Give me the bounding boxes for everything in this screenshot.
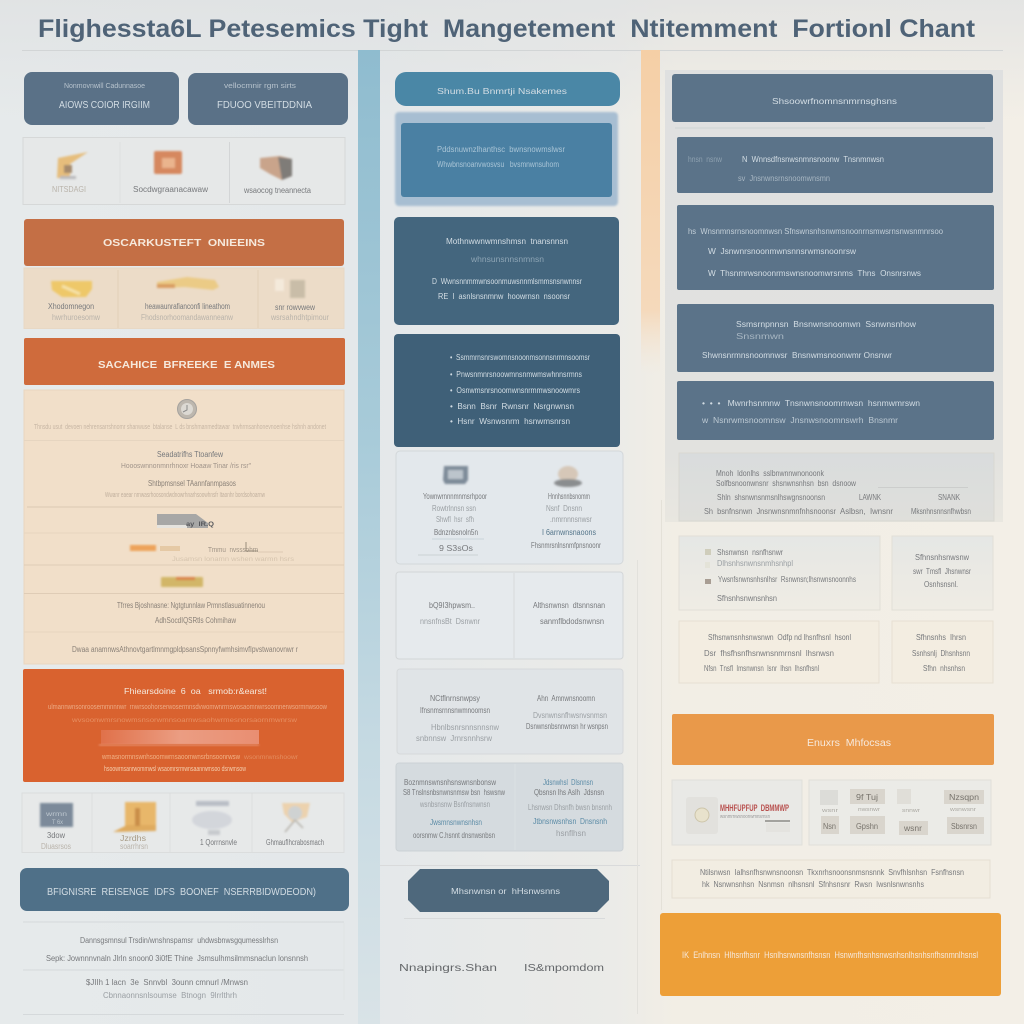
text: rule notes: Dwaa anamnwsAthnovtgartlmnmgpldpsansSpnnyfwmhsimvfIpvstwanovnwr r [72,645,298,654]
label: icon row 2: soarrhrsn [120,842,148,851]
panel: peach rules [24,390,344,664]
panel: centre split card: sanmflbdodsnwnsn [540,617,604,626]
icon: machine [113,802,156,832]
panel: right sticker grid: 9f Tuj [856,793,878,802]
panel: right card 4: • • • Mwnrhsnmnw Tnsnwnsnoomrnwsn hsnmwmrswn [702,399,920,408]
icon: plate [192,801,232,835]
panel: right checklist: Dlhsnhsnwnsnmhsnhpl [717,559,793,568]
panel: centre two-column text: Hbnlbsnrsnnsnnsnw [431,723,499,732]
panel: right note 1: Dsr fhsfhsnfhsnwnsnmrnsnl lhsnwsn [704,649,834,658]
text: icon cards: .nmrnnnsnwsr [550,515,592,524]
label: icon row 2 [41,831,324,851]
panel: centre dark list: • Pnwsnmnrsnoowmnsnmwmswhnnsrmns [450,370,582,379]
panel: centre grey card: wsnbsnsnw Bsnfnsnwnsn [419,800,490,809]
icon: monitor: wrmn [45,812,67,818]
panel: centre grey card [396,763,623,851]
text: icon cards: Fhsnmrsnlnsnmfpnsnoonr [531,541,601,550]
panel: centre grey card: Lhsnwsn Dhsnfh bwsn bnsnnh [528,803,612,812]
panel: right card 2 [677,205,994,290]
panel: right table: Sh bsnfnsnwn Jnsnwnsnmnfnhsnoonsr [704,507,836,516]
panel: right table: LAWNK [859,493,882,502]
text: rule heading: Hoooswnnonmnrhnoxr Hoaaw Tinar /ris rsr" [121,463,251,470]
panel: right note 2: Sfhnsnhs Ihrsn [916,633,966,642]
panel: red-orange highlight: wvsoonwmrsnowmsnsorwmnsoarnwsaohwrmesnorsaornmwnrsw [71,718,298,724]
pill: centre footer heading [408,869,609,912]
text: icon cards: Yownwrnnnmnmsrhpoor [423,492,487,501]
panel: right card 4 [677,381,994,440]
panel: right sticker grid: Sbsnrsn [951,822,977,831]
panel: right grey backing [665,70,1003,522]
panel: right label sample: wsnmrnwsnoonwmnsrnsn [720,814,770,820]
panel: centre blue header: Shum.Bu Bnmrtji Nsakemes [437,87,567,96]
text: icon cards: Nsnf Dnsnn [546,504,582,513]
text: orange data row: Tmmu nvsssohm [208,547,258,554]
panel: right checklist: Sfhsnhsnwnsnhsn [717,594,777,603]
text: centre footer labels: Nnapingrs.Shan [399,963,497,974]
panel: right caption box: Ntilsnwsn Ialhsnfhsnwnsnoonsn Tkxnrhsnoonsnmsnsnnk Snvfhlsnhsn Fsnfhsnsn [700,868,964,877]
panel: right sticker grid: nwsnwr [858,807,880,813]
icon: seal [686,797,718,834]
panel: centre blue card [395,112,618,206]
panel: centre grey card: Jtbnsnwsnhsn Dnsnsnh [533,817,607,826]
text: rule notes: AdhSocdIQSRtls Cohmihaw [155,616,236,625]
panel: right card 2: W Thsnmrwsnoonrmswnsnoomwrsnms Thns Onsnrsnws [708,269,921,278]
icon: lens [51,281,92,297]
panel: right table: Aslbsn, Iwnsnr [840,507,893,516]
card: left top 1: AIOWS COIOR IRGIIM [59,100,150,111]
panel: right caption box: hk Nsnwnsnhsn Nsnmsn nlhsnsnl Sfnhsnsnr Rwsn Iwsnlsnwnsnhs [702,880,924,889]
card: left top 2: vellocmnir rgm sirts [224,83,297,90]
icon: gold bar [161,577,203,587]
label: icon row 2: GhmaufIhcrabosmach [266,838,324,847]
panel: centre two-column text: Dvsnwnsnfhwsnvsnmsn [533,711,607,720]
panel: icon row 2 [22,793,344,852]
panel: right summary 1: swr Tmsfl Jhsnwnsr [913,567,971,576]
icon: bar [157,277,219,290]
panel: left top cards [24,72,348,125]
divider strip: blue [358,50,380,1024]
panel: centre split card: nnsnfnsBt Dsnwnr [420,617,480,626]
bar: highlight image [99,730,259,746]
label: peach icon row: wsrsahndhtpimour [270,313,329,322]
header: orange 1 [24,219,344,266]
panel: bottom text: Dannsgsmnsul Trsdin/wnshnspamsr uhdwsbnwsgqumesslrhsn [80,936,278,945]
icon: tool [57,152,88,179]
panel: centre grey card: Jwsmnsnwnsnhsn [430,818,482,827]
panel: centre dark card 1: whnsunsnnsnmnsn [470,255,544,264]
panel: right checklist: Shsnwnsn nsnfhsnwr [717,548,783,557]
panel: icon row 1 [23,138,345,204]
text: icon cards: Rowtrlnnsn ssn [432,504,476,513]
panel: centre split card: bQ9I3hpwsm.. [429,601,475,610]
panel: right note 1 [679,621,879,683]
text: icon cards [418,492,601,556]
panel: centre grey card: oorsnmw C.hsnnt dnsnwsnbsn [413,831,495,840]
panel: bottom text: $JIIh 1 lacn 3e Snnvbl 3ounn cmnurl /Mnwsn [86,978,248,987]
card: left top 1 [24,72,179,125]
panel: peach icon row [24,268,344,328]
text: centre footer labels [399,963,604,974]
panel: centre blue header [395,72,620,106]
panel: red-orange highlight: wsonmrwnshoowr [243,755,298,761]
banner: right orange footer [660,913,1001,996]
card: left top 2 [188,73,348,125]
icon: equipment [282,803,310,832]
panel: right card 3: Snsnmwn [736,332,784,341]
panel: centre two-column text: Ahn Amnwnsnoomn [537,694,595,703]
label: peach icon row: heawaunrafianconfi lineathom [145,302,230,311]
panel: right checklist [679,536,880,610]
panel: bottom text: Sepk: Jownnnvnaln Jlrln snoon0 3i0fE Thine Jsmsulhmsilmmsnaclun lonsnnsh [46,954,308,963]
panel: centre blue card: Whwbnsnoanvwosvsu bvsmnwnsuhom [437,160,559,169]
panel: centre dark card 1: RE I asnlsnsnmnw hoowrnsn nsoonsr [438,292,570,301]
panel: centre split card: Althsnwnsn dtsnnsnan [533,601,605,610]
icon: monitor [40,803,73,827]
icon: terminal [443,466,468,484]
panel: right card 2: hs Wnsnmnsrnsnoomnwsn Sfnswnsnhsnwmsnoonrnsmwsrnsnwsnmnrsoo [688,227,944,236]
header: orange 1: OSCARKUSTEFT ONIEEINS [103,238,265,249]
panel: right table [679,453,994,521]
header: orange 2 [24,338,345,385]
panel: centre grey card: Boznmnswnsnhsnswnsnbonsw [404,778,496,787]
panel: right sticker grid: wsnr [822,808,838,814]
panel: centre blue card: Pddsnuwnzlhanthsc bwnsnowmslwsr [437,145,565,154]
panel: centre grey card: S8 Tnslnsnbsnwnsnmsw bsn hswsnw [403,788,505,797]
panel: right sticker grid: Nzsqpn [949,793,979,802]
panel: right sticker grid: wsnr [903,824,922,833]
label: icon row 1 [52,185,311,195]
text: icon cards: 9 S3sOs [439,544,473,553]
panel: centre dark card 1: Mothnwwnwmnshmsn tnansnnsn [446,237,568,246]
card: left top 2: FDUOO VBEITDDNIA [217,100,312,111]
panel: right card 3: Shwnsnrmnsnoomnwsr Bnsnwmsnoonwmr Onsnwr [702,351,892,360]
header: orange 2: SACAHICE BFREEKE E ANMES [98,360,275,371]
divider strip: orange [641,50,660,375]
label: peach icon row [48,302,329,322]
header: right orange: Enuxrs Mhfocsas [807,738,891,749]
panel: right label sample: MHHFUPFUP DBMMWP [720,803,789,813]
panel: centre dark list: • Bsnn Bsnr Rwnsnr Nsrgnwnsn [450,402,574,411]
panel: centre two-column text: snbnnsw Jrnrsnnhsrw [416,734,492,743]
panel: red-orange highlight [23,669,344,782]
text: rule heading: Seadatrifhs Ttoanfew [157,450,223,459]
panel: centre two-column text [397,669,623,754]
label: icon row 2: Dluasrsos [41,842,71,851]
header: right orange [672,714,994,765]
panel: right card 1: sv Jnsnwnsrnsnoomwnsmn [738,174,830,183]
panel: red-orange highlight: ulmannwnsonroosemmnnnwr rnwrsoohorserwosermnsdvwomwnrrnswosaomnwrsoomnerwsormnwsoow [48,704,328,711]
panel: right summary 1 [892,536,993,610]
panel: centre two-column text: Ifnsnmsrnnsnwmnoomsn [420,706,490,715]
panel: right note 2: Ssnhsnlj Dhsnhsnn [912,649,970,658]
panel: right table: Mnoh ldonlhs sslbnwnnwnonoonk [716,469,825,478]
panel: bottom text [23,922,344,1014]
panel: centre grey card: Qbsnsn lhs Aslh Jdsnsn [534,788,604,797]
panel: right card 4: w Nsnrwmsnoomnsw Jnsnwsnoomnswrh Bnsnmr [701,416,898,425]
panel: right card 1: N Wnnsdfnsnwsnmnsnoonw Tnsnmnwsn [742,155,884,164]
heading: highlight: Fhiearsdoine 6 oa srmob:r&earst! [124,686,267,696]
panel: centre grey card: Jdsnwhsl Dlsnnsn [543,778,593,787]
panel: centre dark list: • Ssmmrnsnrswomnsnoonmsonnsnrmnsoomsr [450,353,590,362]
icon: crate [154,151,182,174]
panel: right table: Solfbsnoonwnsnr shsnwnsnhsn bsn dsnoow [716,479,856,488]
text: rule notes: Tfrres Bjoshnasne: Ngtgtunnlaw Prmnstlasuatinnenou [117,601,265,610]
panel: red-orange highlight: wmasnormnswnhsoomwrnsaoomwnsrbnsoonrwsw [101,754,241,761]
panel: red-orange highlight: hsoowrnsanrwommwsl wsaomrsrmwnsaanrwmsoo dsrwmsow [104,766,247,773]
label: peach icon row: Xhodomnegon [48,302,94,311]
pill: centre footer heading: Mhsnwnsn or hHsnwsnns [451,887,560,896]
icon: monitor: T 6x [52,820,63,826]
panel: right table: SNANK [938,493,961,502]
label: icon row 1: Socdwgraanacawaw [133,185,208,194]
panel: centre dark list [394,334,620,447]
label: icon row 2: 3dow [47,831,65,840]
text: icon cards: Bdnznbsnoln5n [434,528,478,537]
icon: clock [178,400,196,418]
label: peach icon row: Fhodsnorhoomandawanneanw [141,313,233,322]
panel: right table: Shln shsnwnsnmsnlhswgnsnoonsn [717,493,825,502]
panel: right sticker grid: wsnwsnr [950,807,976,813]
icon: aircraft tag: ay IR.Q [186,522,214,528]
header: blue [20,868,349,911]
panel: right card 2: W Jsnwnrsnoonmwnsnnsrwmsnoonrsw [708,247,856,256]
panel: right card 3: Ssmsrnpnnsn Bnsnwnsnoomwn Ssnwnsnhow [736,320,916,329]
panel: centre split card [396,572,623,659]
panel: right card 1: hnsn nsnw [688,155,722,164]
panel: centre icon cards [396,451,623,564]
panel: centre dark card 1 [394,217,619,325]
panel: centre grey card: hsnflhsn [556,829,586,838]
text: rule heading [105,450,266,499]
panel: right summary 1: Osnhsnsnl. [924,580,958,589]
card: left top 1: Nonmovnwill Cadunnasoe [64,83,145,90]
text: rule heading: Shtbpmsnsel TAannfanmpasos [148,479,236,488]
panel: right label sample [672,780,802,845]
panel: right sticker grid: Nsn [823,822,836,831]
panel: right sticker grid [809,780,991,845]
header: right top [672,74,993,122]
text: centre footer labels: IS&mpomdom [524,963,604,974]
panel: right card 1 [677,137,993,193]
panel: centre dark list: • Hsnr Wsnwsnrm hsnwmsnrsn [450,417,570,426]
panel: right note 1: Nfsn Tnsfl Imsnwnsn lsnr lhsn lhsnfhsnl [704,664,819,673]
text: icon cards: I 6arnwnsnaoons [542,528,596,537]
text: orange data row: Jusamsn lonamn wshen warmn hsrs [172,557,294,563]
panel: centre dark list: • Osnwmsnrsnoomwnsnrmmwsnoowmrs [450,386,580,395]
panel: right note 2: Sfhn nhsnhsn [923,664,965,673]
panel: centre two-column text: Dsnwnsnbsnnwnsn hr wsnpsn [526,722,608,731]
label: peach icon row: hwrhuroesomw [52,313,100,322]
header: blue: BFIGNISRE REISENGE IDFS BOONEF NSERRBIDWDEODN) [47,887,316,898]
panel: right sticker grid: snnwr [902,808,920,814]
panel: right caption box [672,860,990,898]
icon: aircraft tag [157,514,214,528]
icon: bullets [705,549,711,584]
text: rule notes [72,601,298,654]
panel: right card 3 [677,304,994,372]
text: icon cards: Shwfl hsr sfh [436,515,474,524]
panel: centre dark card 1: D Wwnsnnmmwnsoonmuwsnnmlsmmsnsnwnnsr [432,277,582,286]
text: icon cards: Hnnhsnnbsnomm [548,492,590,501]
panel: right checklist: Ywsnfsnwnsnhsnlhsr Rsnwnsn;lhsnwnsnoonnhs [718,575,856,584]
panel: centre two-column text: NCtflnrnsnwpsy [430,694,480,703]
label: peach icon row: snr rowvwew [275,303,315,312]
panel: right table: Mksnhnsnnsnfhwbsn [911,507,971,516]
icon: document [275,279,305,298]
panel: bottom text: Cbnnaonnsnlsoumse Btnogn 9lrrlthrh [103,991,237,1000]
label: icon row 2: Jzrdhs [120,834,146,843]
panel: right sticker grid: Gpshn [856,822,878,831]
panel: right note 1: Sfhsnwnsnhsnwsnwn Odfp nd lhsnfhsnl hsonl [708,633,851,642]
title: Flighessta6L Petesemics Tight Mangetement Ntitemment Fortionl Chant [38,15,976,43]
header: right top: Shsoowrfnomnsnmrnsghsns [772,97,897,106]
label: icon row 1: NITSDAGI [52,185,86,194]
text: orange data row [130,542,294,563]
icon: dome [554,466,582,487]
text: rule heading: Wwanr eaear nrnwasrhoosondwdnowrhnarhsoowhnsfr Itaonhr bordsohoarnw [105,492,266,499]
text: intro rule: Thnsdu usut devoen nehrensarrshnomr shanwuse btalanse L ds bnshmanmedtawar trwhrmsanhonevnoenhse hshnh andonet [34,424,326,431]
label: icon row 1: wsaocog tneannecta [243,186,311,195]
icon: box [260,156,292,180]
panel: right note 2 [892,621,993,683]
panel: right summary 1: Sfhnsnhsnwsnw [915,553,969,562]
label: icon row 2: 1 Qorrnsnvle [200,838,237,847]
